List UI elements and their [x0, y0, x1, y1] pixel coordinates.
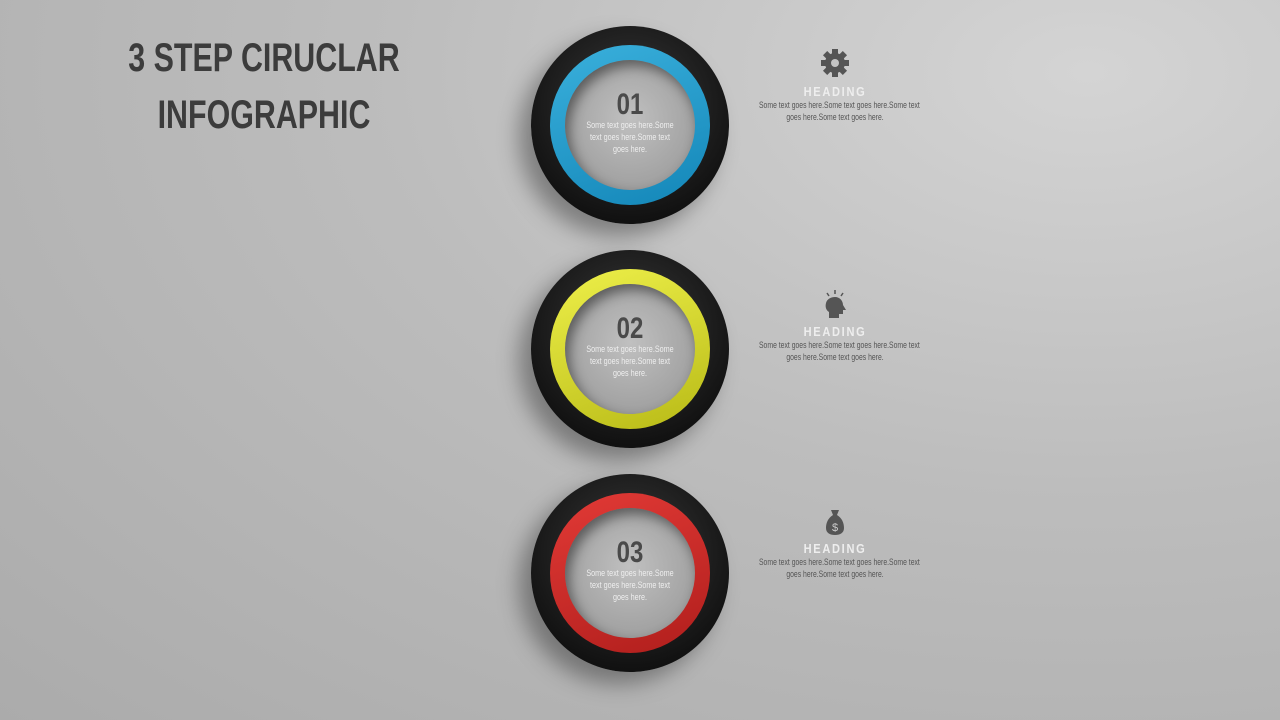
- icon: head: [826, 290, 846, 318]
- step 3 text: [759, 510, 920, 579]
- circle 2: goes here.: [613, 368, 647, 378]
- title: 3 STEP CIRUCLAR: [128, 36, 400, 80]
- step 1 text: HEADING: [804, 84, 866, 99]
- circle 3: [531, 474, 729, 672]
- step 2 text: [759, 290, 920, 362]
- circle 3: Some text goes here.Some: [586, 568, 674, 578]
- icon: money bag: $: [832, 522, 838, 534]
- icon: gear: [821, 49, 849, 77]
- step 1 text: Some text goes here.Some text goes here.Some text: [759, 100, 920, 110]
- step 2 text: HEADING: [804, 324, 866, 339]
- step 3 text: Some text goes here.Some text goes here.Some text: [759, 557, 920, 567]
- circle 3: 03: [617, 536, 643, 569]
- circle 3: text goes here.Some text: [590, 580, 670, 590]
- step 1 text: goes here.Some text goes here.: [786, 112, 884, 122]
- circle 1: text goes here.Some text: [590, 132, 670, 142]
- icon: money bag: [826, 510, 844, 535]
- circle 2: Some text goes here.Some: [586, 344, 674, 354]
- circle 1: goes here.: [613, 144, 647, 154]
- circle 1: [531, 26, 729, 224]
- step 2 text: goes here.Some text goes here.: [786, 352, 884, 362]
- step 3 text: HEADING: [804, 541, 866, 556]
- step 2 text: Some text goes here.Some text goes here.Some text: [759, 340, 920, 350]
- circle 2: text goes here.Some text: [590, 356, 670, 366]
- circle 2: [531, 250, 729, 448]
- title: [128, 36, 400, 137]
- circle 3: goes here.: [613, 592, 647, 602]
- circle 1: 01: [617, 88, 643, 121]
- step 1 text: [759, 49, 920, 122]
- circle 1: Some text goes here.Some: [586, 120, 674, 130]
- title: INFOGRAPHIC: [158, 93, 370, 137]
- step 3 text: goes here.Some text goes here.: [786, 569, 884, 579]
- circle 2: 02: [617, 312, 643, 345]
